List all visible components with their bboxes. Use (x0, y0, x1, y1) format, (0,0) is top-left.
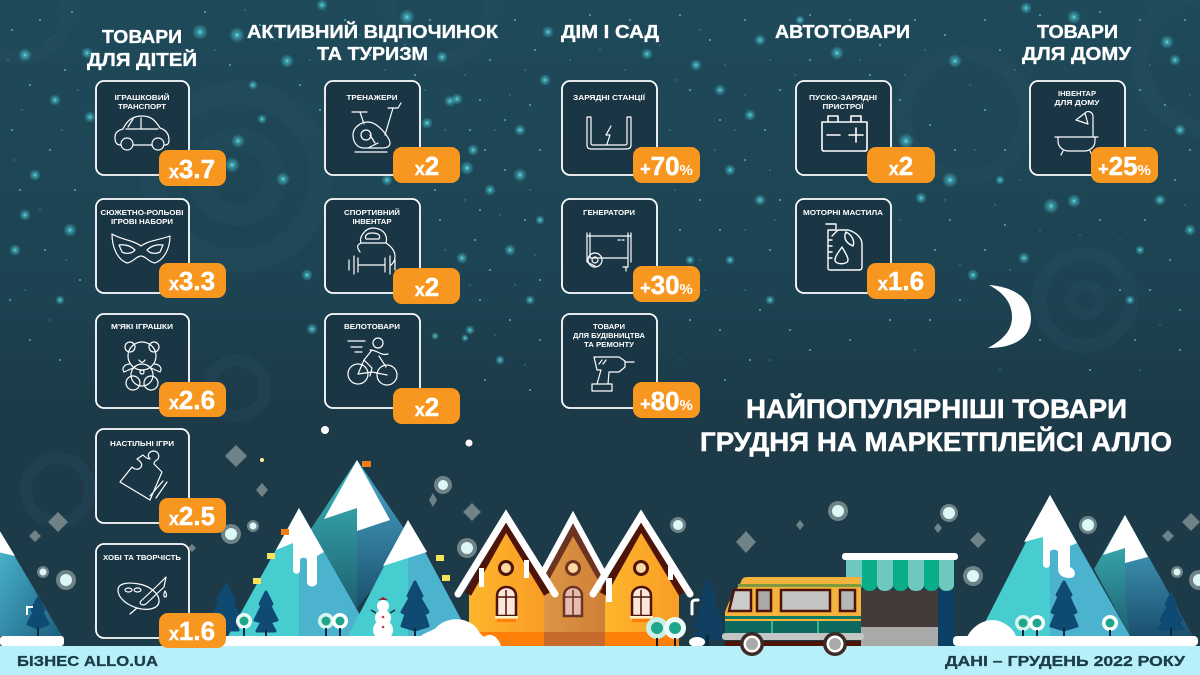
snow ground and mounds (0, 619, 1198, 646)
shop (842, 553, 958, 646)
card: інвентар для дому: ІНВЕНТАР (1058, 89, 1096, 98)
card: інвентар для дому: ДЛЯ ДОМУ (1054, 98, 1100, 107)
right peak (348, 520, 470, 636)
card: товари для будівництва та ремонту: ДЛЯ БУДІВНИЦТВА (573, 331, 646, 340)
icon: mask (112, 234, 170, 263)
bottom footer band: ДАНІ – ГРУДЕНЬ 2022 РОКУ (945, 653, 1186, 670)
icon: puzzle (120, 451, 167, 500)
card: спортивний інвентар: СПОРТИВНИЙ (344, 208, 400, 217)
middle peak (290, 460, 412, 608)
card: велотовари: ВЕЛОТОВАРИ (344, 322, 400, 331)
badge: +70%: +70% (640, 151, 693, 181)
card: пуско-зарядні пристрої (796, 81, 935, 183)
heading: дім і сад: ДІМ І САД (561, 22, 659, 42)
heading: активний відпочинок: ТА ТУРИЗМ (317, 44, 428, 64)
card: інвентар для дому (1030, 81, 1158, 183)
mountains left group (212, 460, 470, 640)
badge: x2: x2 (415, 151, 439, 181)
card: генератори: ГЕНЕРАТОРИ (583, 208, 635, 217)
mountains right group (978, 495, 1193, 637)
right trees (1051, 582, 1183, 637)
heading: активний відпочинок: АКТИВНИЙ ВІДПОЧИНОК (247, 21, 499, 42)
card: пуско-зарядні пристрої: ПУСКО-ЗАРЯДНІ (809, 93, 877, 102)
icon: motor oil canister (826, 224, 862, 270)
card: м'які іграшки: М'ЯКІ ІГРАШКИ (111, 322, 173, 331)
card: генератори (562, 199, 700, 302)
card: іграшковий транспорт (96, 81, 226, 186)
badge: +80%: +80% (640, 386, 693, 416)
icon: car battery (822, 116, 867, 151)
title: ГРУДНЯ НА МАРКЕТПЛЕЙСІ АЛЛО (700, 426, 1172, 457)
left peak (228, 508, 372, 636)
card: товари для будівництва та ремонту: ТА РЕМОНТУ (584, 340, 634, 349)
flags (281, 461, 371, 535)
badge: x2: x2 (889, 151, 913, 181)
back peak (1094, 515, 1193, 636)
heading: автотовари: АВТОТОВАРИ (775, 22, 910, 42)
van wheels (740, 632, 847, 656)
icon: bike wheel (361, 130, 371, 140)
card: настільні ігри: НАСТІЛЬНІ ІГРИ (110, 439, 174, 448)
heading: товари для дітей: ТОВАРИ (102, 27, 182, 47)
card: пуско-зарядні пристрої: ПРИСТРОЇ (822, 102, 864, 111)
floating diamonds and snow orbs (29, 426, 1200, 590)
badge: x1.6: x1.6 (878, 266, 924, 296)
bottom footer band (0, 646, 1200, 675)
middle house (540, 517, 606, 646)
icon: teddy bear (123, 342, 161, 390)
van (722, 577, 864, 656)
right house (593, 516, 690, 646)
card: іграшковий транспорт: ТРАНСПОРТ (118, 102, 166, 111)
card: хобі та творчість (96, 544, 226, 648)
icon: bathtub with shower (1055, 112, 1098, 155)
awning (846, 560, 954, 591)
title: НАЙПОПУЛЯРНІШІ ТОВАРИ (746, 393, 1127, 424)
badge: x2.5: x2.5 (169, 501, 215, 531)
badge: x2: x2 (415, 272, 439, 302)
dark tree near van (689, 577, 728, 647)
badge: +25%: +25% (1098, 151, 1151, 181)
van windows (729, 590, 855, 611)
card: зарядні станції (562, 81, 700, 183)
icon: charging station (587, 117, 631, 149)
card: сюжетно-рольові ігрові набори: СЮЖЕТНО-РОЛЬОВІ (100, 208, 184, 217)
right round trees (1015, 615, 1118, 636)
card: зарядні станції: ЗАРЯДНІ СТАНЦІЇ (573, 93, 646, 102)
left corner mountain (0, 528, 62, 637)
heading: товари для дому: ТОВАРИ (1037, 22, 1118, 42)
starry sky (8, 0, 1196, 390)
card: спортивний інвентар (325, 199, 460, 304)
badge: x1.6: x1.6 (169, 616, 215, 646)
title (700, 393, 1172, 457)
card: товари для будівництва та ремонту (562, 314, 700, 418)
moon (988, 285, 1031, 348)
heading: товари для дітей (87, 27, 197, 70)
icon: palette and brush (118, 577, 166, 614)
round trees by the houses (646, 617, 686, 646)
card: спортивний інвентар: ІНВЕНТАР (352, 217, 392, 226)
card: товари для будівництва та ремонту: ТОВАРИ (593, 322, 625, 331)
heading: товари для дітей: ДЛЯ ДІТЕЙ (87, 49, 197, 70)
card: моторні мастила: МОТОРНІ МАСТИЛА (803, 208, 884, 217)
card: сюжетно-рольові ігрові набори (96, 199, 226, 298)
badge: +30%: +30% (640, 270, 693, 300)
yellow flags (253, 553, 450, 584)
heading: товари для дому: ДЛЯ ДОМУ (1022, 44, 1132, 64)
badge: x3.3: x3.3 (169, 266, 215, 296)
card: хобі та творчість: ХОБІ ТА ТВОРЧІСТЬ (103, 553, 182, 562)
heading: товари для дому (1022, 22, 1132, 64)
card: сюжетно-рольові ігрові набори: ІГРОВІ НАБОРИ (111, 217, 173, 226)
bottom footer band: БІЗНЕС ALLO.UA (17, 653, 158, 670)
trees (212, 582, 428, 637)
card: тренажери: ТРЕНАЖЕРИ (346, 93, 398, 102)
card: моторні мастила (796, 199, 935, 299)
icon: drill (592, 357, 634, 391)
icon: car (115, 116, 169, 145)
icon: exercise bike (352, 103, 401, 152)
badge: x2.6: x2.6 (169, 385, 215, 415)
card: іграшковий транспорт: ІГРАШКОВИЙ (114, 93, 170, 102)
icon: kettlebell and dumbbell (349, 228, 395, 274)
left house (458, 516, 555, 646)
card: велотовари (325, 314, 460, 424)
card: м'які іграшки (96, 314, 226, 417)
snowman (371, 597, 395, 640)
icon: car wheels (121, 138, 164, 150)
badge: x3.7: x3.7 (169, 154, 215, 184)
front peak (978, 495, 1130, 636)
background concentric rings (0, 0, 1200, 522)
houses (458, 516, 690, 646)
round trees (236, 613, 348, 636)
card: тренажери (325, 81, 460, 183)
badge: x2: x2 (415, 392, 439, 422)
card: настільні ігри (96, 429, 226, 533)
icon: cyclist (348, 338, 397, 385)
icon: generator (587, 233, 631, 271)
heading: активний відпочинок (247, 21, 499, 64)
